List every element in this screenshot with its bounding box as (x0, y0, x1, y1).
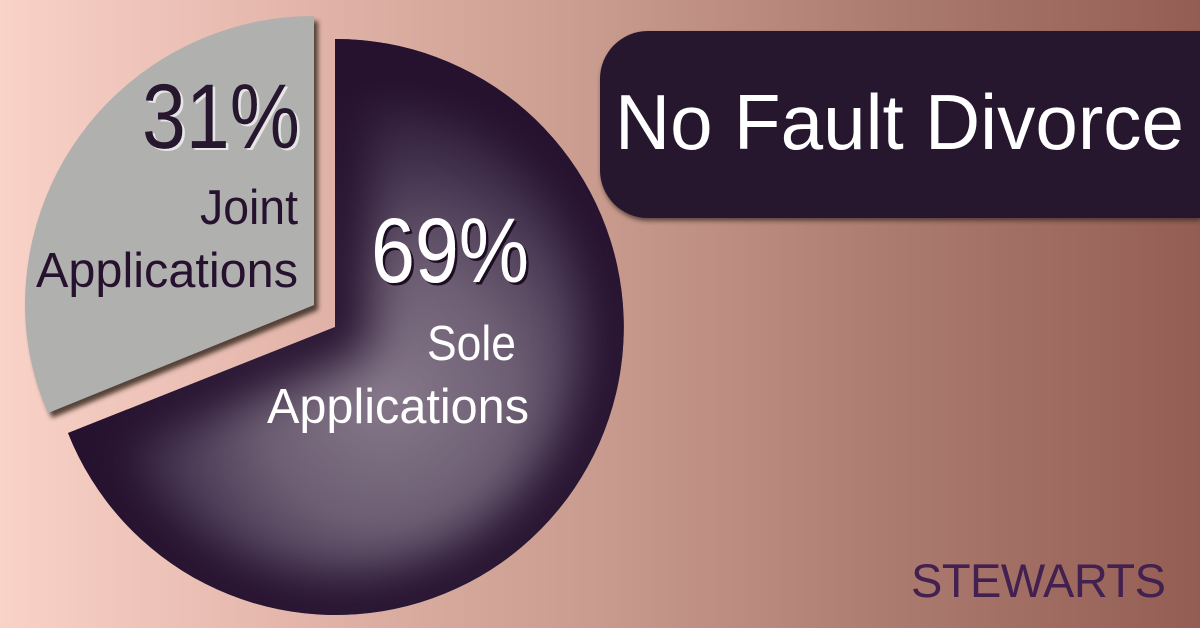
title background box (600, 31, 1200, 218)
pie chart (25, 16, 624, 615)
label: Joint: Joint (200, 181, 298, 235)
panel: title banner (600, 31, 1200, 218)
value: 69%: 69% (371, 200, 529, 302)
pie slice: sole applications 69% (68, 39, 624, 615)
pie slice: joint applications 31% (25, 16, 314, 413)
label: Applications: Applications (36, 244, 298, 298)
label: Sole: Sole (427, 317, 516, 371)
value: 31%: 31% (142, 66, 300, 168)
logo: Stewarts: STEWARTS (911, 554, 1166, 607)
title: No Fault Divorce (615, 78, 1184, 166)
label: Applications: Applications (267, 380, 529, 434)
